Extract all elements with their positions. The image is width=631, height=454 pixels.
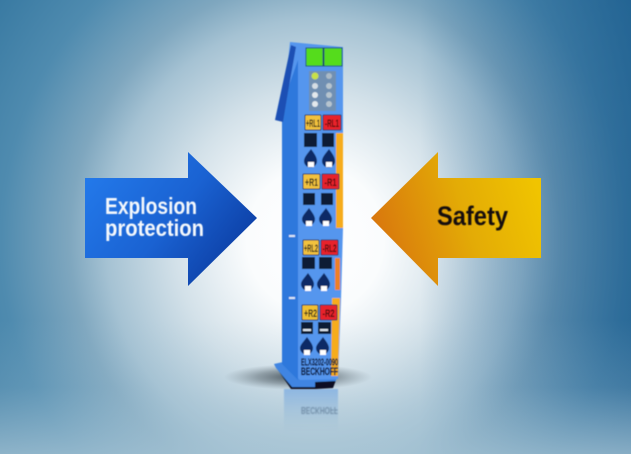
terminal group: R2 — [300, 305, 337, 355]
device reflection — [284, 389, 338, 433]
reflected brand text: BECKHOFF — [301, 404, 338, 415]
housing ticks — [289, 235, 295, 299]
floor lightening — [0, 320, 631, 454]
terminal group: RL2 — [301, 240, 338, 291]
label: Explosion protection: Explosion — [105, 193, 197, 219]
terminal module — [274, 42, 343, 389]
housing — [282, 42, 343, 380]
left arrow: Explosion protection — [85, 152, 257, 286]
background darkening on the right — [420, 0, 631, 454]
right arrow: Safety — [371, 152, 541, 286]
terminal group: RL2: -RL2 — [322, 243, 336, 255]
terminal group: R2: +R2 — [304, 308, 317, 320]
terminal group: R1: +R1 — [305, 177, 318, 189]
label: Explosion protection: protection — [105, 215, 204, 241]
brand name: BECKHOFF — [301, 366, 338, 378]
terminal group: RL1: +RL1 — [306, 118, 320, 130]
LED panel — [309, 71, 336, 111]
green buttons — [306, 48, 342, 66]
device shadow — [224, 364, 372, 390]
orange strip — [336, 133, 343, 228]
side flap — [275, 45, 296, 122]
foot underside — [274, 364, 336, 389]
model number: ELX3202-0090 — [301, 356, 338, 368]
terminal group: R1: -R1 — [324, 177, 336, 189]
label: Safety: Safety — [437, 201, 508, 231]
left column of housing — [282, 60, 298, 380]
terminal group: RL1 — [304, 115, 341, 168]
terminal group: R2: -R2 — [322, 308, 334, 320]
terminal group: RL2: +RL2 — [304, 243, 318, 255]
terminal group: R1 — [302, 174, 339, 226]
terminal group: RL1: -RL1 — [325, 118, 339, 130]
foot — [274, 362, 336, 387]
